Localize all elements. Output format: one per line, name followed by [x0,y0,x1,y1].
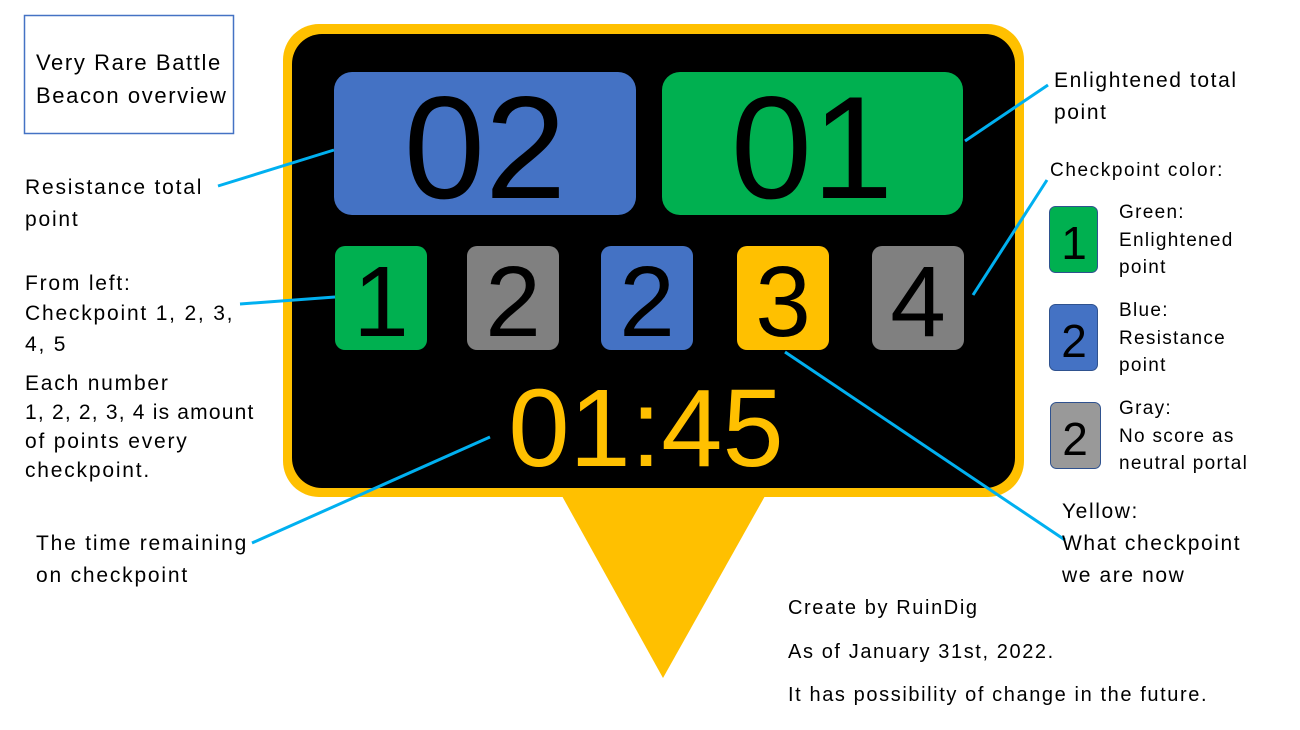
left annotations: checkpoint. [25,459,151,482]
enlightened score box: 01 [731,66,893,229]
left annotations: 1, 2, 2, 3, 4 is amount [25,401,255,424]
checkpoint boxes: 1 [353,246,409,358]
callout lines [218,85,1065,543]
title: Very Rare Battle [36,50,222,75]
title [24,16,234,134]
timer: 01:45 [508,367,784,490]
legend [1050,202,1248,474]
right annotations: Enlightened total [1054,69,1238,92]
legend: 1 [1061,217,1087,269]
checkpoint boxes: 3 [755,246,811,358]
checkpoint boxes: 2 [485,246,541,358]
left annotations: Each number [25,372,170,395]
checkpoint boxes [335,246,964,358]
right annotations [1050,69,1241,587]
checkpoint boxes: 4 [890,246,946,358]
left annotations [25,176,255,587]
legend: Enlightened [1119,230,1234,251]
credits: As of January 31st, 2022. [788,641,1055,663]
left annotations: Checkpoint 1, 2, 3, [25,302,234,325]
credits: It has possibility of change in the future. [788,684,1208,706]
legend: 2 [1062,413,1088,465]
legend: point [1119,257,1167,278]
credits: Create by RuinDig [788,597,979,619]
legend: point [1119,355,1167,376]
enlightened score box [662,66,963,229]
left annotations: From left: [25,272,132,295]
beacon board [283,24,1024,497]
left annotations: Resistance total [25,176,203,199]
credits [788,597,1208,706]
legend: No score as [1119,426,1235,447]
left annotations: The time remaining [36,532,248,555]
legend: Blue: [1119,300,1169,321]
right annotations: point [1054,101,1108,124]
beacon pointer triangle [562,496,765,678]
left annotations: point [25,208,80,231]
left annotations: of points every [25,430,189,453]
resistance score box [334,66,636,229]
legend: 2 [1061,315,1087,367]
left annotations: on checkpoint [36,564,189,587]
legend: Gray: [1119,398,1172,419]
left annotations: 4, 5 [25,333,67,356]
right annotations: Checkpoint color: [1050,160,1224,181]
legend: neutral portal [1119,453,1248,474]
title: Beacon overview [36,83,228,108]
right annotations: we are now [1061,564,1185,587]
legend: Resistance [1119,328,1226,349]
resistance score box: 02 [404,66,566,229]
legend: Green: [1119,202,1185,223]
right annotations: What checkpoint [1062,532,1241,555]
checkpoint boxes: 2 [619,246,675,358]
right annotations: Yellow: [1062,500,1139,523]
